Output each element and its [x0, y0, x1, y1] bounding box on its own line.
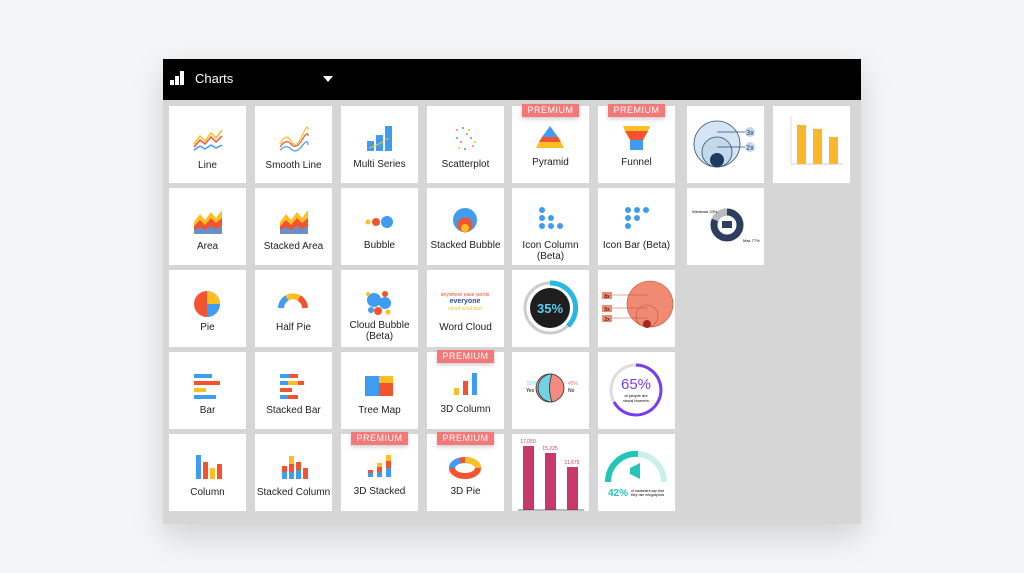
- tile: Word Cloud: [427, 270, 504, 347]
- tile: 42% gauge: they use infographics: [631, 493, 664, 497]
- tile: 42% gauge: 42%: [608, 488, 628, 499]
- tile: 3D Stacked: 3D Stacked: [354, 486, 405, 497]
- tile: 3D Pie: [427, 434, 504, 511]
- tile: Bubble: [341, 188, 418, 265]
- tile: red nested circles: 8x: [604, 294, 610, 300]
- tile: Tree Map: Tree Map: [358, 405, 401, 416]
- tile: Icon Column: [512, 188, 589, 265]
- tile: 65% ring: visual learners: [623, 398, 649, 403]
- tile: magenta column chart: [512, 434, 589, 511]
- badge: premium: PREMIUM: [442, 433, 488, 443]
- tile: Stacked Bar: Stacked Bar: [266, 405, 321, 416]
- tile: Half Pie: Half Pie: [276, 322, 311, 333]
- tile: 35% donut: 35%: [537, 301, 563, 316]
- tile: Stacked Bar: [255, 352, 332, 429]
- tile: Pie: [169, 270, 246, 347]
- tile: Scatterplot: Scatterplot: [442, 159, 489, 170]
- tile: yes/no pie: 55%: [527, 381, 538, 387]
- icon: bar chart: [170, 71, 184, 85]
- tile: Column: Column: [190, 487, 225, 498]
- tile: Icon Column: Icon Column: [522, 240, 579, 251]
- tile: Pyramid: [512, 106, 589, 183]
- tile: Word Cloud: everyone: [450, 298, 480, 305]
- badge: premium: PREMIUM: [442, 351, 488, 361]
- tile: nested circles: [687, 106, 764, 183]
- tile: magenta column chart: 11,675: [565, 460, 580, 466]
- badge: premium: [351, 432, 408, 445]
- tile: yes/no pie: 45%: [568, 381, 579, 387]
- tile: Half Pie: [255, 270, 332, 347]
- tile: Area: [169, 188, 246, 265]
- tile: 65% ring: 65%: [621, 376, 651, 393]
- tile: Icon Bar: Icon Bar (Beta): [603, 240, 670, 251]
- tile: red nested circles: 2x: [604, 317, 610, 323]
- tile: Pie: Pie: [200, 322, 215, 333]
- tile: red nested circles: [598, 270, 675, 347]
- header title: Charts: [195, 71, 233, 86]
- tile: donut device: [687, 188, 764, 265]
- tile: 3D Column: 3D Column: [440, 404, 491, 415]
- tile: Icon Bar: [598, 188, 675, 265]
- badge: premium: PREMIUM: [614, 105, 660, 115]
- tile: Stacked Column: [255, 434, 332, 511]
- tile: nested circles: 3x: [746, 130, 754, 137]
- tile: 65% ring: of people are: [624, 393, 648, 398]
- tile: Area: Area: [197, 241, 218, 252]
- badge: premium: [522, 104, 579, 117]
- tile: Cloud Bubble: (Beta): [366, 331, 393, 342]
- badge: premium: [437, 350, 494, 363]
- tile: donut device: Mac 77%: [743, 238, 760, 243]
- tile: donut device: Windows 33%: [692, 209, 718, 214]
- tile: yes/no pie: Yes: [526, 388, 535, 394]
- tile: Stacked Area: Stacked Area: [264, 241, 323, 252]
- tile: magenta column chart: 15,225: [542, 446, 558, 452]
- tile: yes/no pie: [512, 352, 589, 429]
- tile: Column: [169, 434, 246, 511]
- panel: chart picker: [163, 59, 861, 524]
- tile: 42% gauge: of marketers say that: [631, 489, 664, 493]
- badge: premium: PREMIUM: [528, 105, 574, 115]
- tile: Word Cloud: Word Cloud: [439, 322, 492, 333]
- tile: Icon Column: (Beta): [537, 251, 564, 262]
- tile: Smooth Line: [255, 106, 332, 183]
- tile: Stacked Bubble: Stacked Bubble: [430, 240, 501, 251]
- tile: 3D Stacked: [341, 434, 418, 511]
- tile: Multi Series: [341, 106, 418, 183]
- tile: Tree Map: [341, 352, 418, 429]
- tile: Bar: Bar: [200, 405, 215, 416]
- tile: Funnel: [598, 106, 675, 183]
- badge: premium: [608, 104, 665, 117]
- tile: Multi Series: Multi Series: [353, 159, 406, 170]
- badge: premium: PREMIUM: [356, 433, 402, 443]
- tile: 3D Pie: 3D Pie: [450, 486, 480, 497]
- tile: 65% ring: [598, 352, 675, 429]
- tile: 35% donut: [512, 270, 589, 347]
- tile: Scatterplot: [427, 106, 504, 183]
- header bar: [163, 59, 861, 100]
- icon: dropdown arrow: [323, 76, 333, 82]
- tile: 3D Column: [427, 352, 504, 429]
- tile: Stacked Bubble: [427, 188, 504, 265]
- tile: magenta column chart: 17,050: [520, 439, 536, 445]
- tile: Word Cloud: cloud word text: [448, 306, 482, 312]
- tile: yes/no pie: No: [568, 388, 575, 394]
- tile: Bubble: Bubble: [364, 240, 395, 251]
- tile: Bar: [169, 352, 246, 429]
- tile: Funnel: Funnel: [621, 157, 652, 168]
- tile: Pyramid: Pyramid: [532, 157, 569, 168]
- tile: Word Cloud: anywhere ease words: [441, 292, 490, 298]
- tile: Line: [169, 106, 246, 183]
- tile: Smooth Line: Smooth Line: [265, 160, 322, 171]
- tile: Cloud Bubble: [341, 270, 418, 347]
- tile: 42% gauge: [598, 434, 675, 511]
- tile: Line: Line: [198, 160, 217, 171]
- tile: Cloud Bubble: Cloud Bubble: [349, 320, 410, 331]
- tile: bar chart yellow: [773, 106, 850, 183]
- tile: red nested circles: 5x: [604, 307, 610, 313]
- tile: Stacked Column: Stacked Column: [257, 487, 330, 498]
- tile: Stacked Area: [255, 188, 332, 265]
- tile: nested circles: 2x: [746, 145, 754, 152]
- badge: premium: [437, 432, 494, 445]
